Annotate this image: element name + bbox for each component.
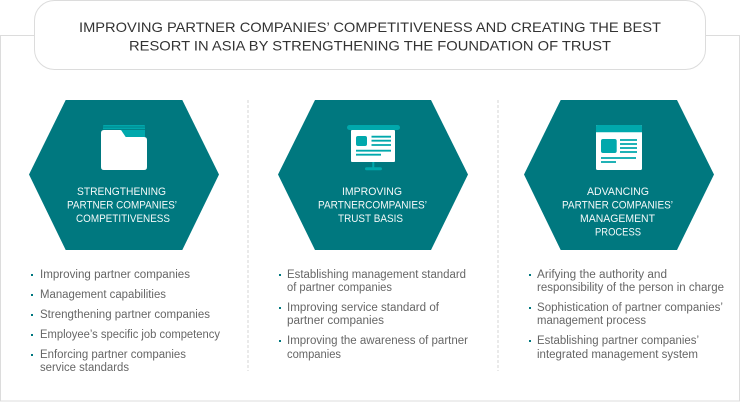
list: trust basis items: partner companies [287,315,384,327]
title box: RESORT IN ASIA BY STRENGTHENING THE FOUNDATION OF TRUST [129,38,611,54]
heading: advancing management process: ADVANCING [587,186,649,198]
list: competitiveness items: service standards [40,362,129,374]
heading: strengthening competitiveness: STRENGTHENING [77,186,166,198]
panel: management process [524,100,724,361]
icon: document window [596,125,642,170]
heading: improving trust basis: PARTNERCOMPANIES’ [318,200,427,212]
hexagon: competitiveness [29,100,219,250]
list: competitiveness items: Strengthening partner companies [40,309,210,321]
heading: strengthening competitiveness [67,186,177,225]
hexagon: management process [524,100,714,250]
heading: strengthening competitiveness: PARTNER COMPANIES’ [67,200,177,212]
list: management process items [529,269,724,361]
list: competitiveness items [31,269,220,374]
list: competitiveness items: Enforcing partner companies [40,349,186,361]
heading: improving trust basis: IMPROVING [342,186,402,198]
heading: advancing management process: PROCESS [595,226,641,238]
heading: advancing management process: MANAGEMENT [580,213,655,225]
list: trust basis items: Improving the awareness of partner [287,335,468,347]
title box [34,0,706,70]
list: competitiveness items: Employee’s specific job competency [40,329,220,341]
panel: competitiveness [29,100,220,374]
icon: presentation board [347,125,400,170]
list: trust basis items: Improving service standard of [287,302,440,314]
list: management process items: management process [537,315,646,327]
list: management process items: integrated management system [537,349,698,361]
list: management process items: Establishing partner companies’ [537,335,699,347]
panel: trust basis [278,100,468,361]
list: management process items: responsibility of the person in charge [537,282,724,294]
heading: improving trust basis [318,186,427,225]
list: management process items: Sophistication of partner companies’ [537,302,723,314]
heading: improving trust basis: TRUST BASIS [338,213,403,225]
heading: advancing management process: PARTNER COMPANIES’ [562,200,673,212]
icon: folder [101,125,147,170]
list: trust basis items: companies [287,349,341,361]
list: competitiveness items: Improving partner companies [40,269,190,281]
list: trust basis items: Establishing management standard [287,269,466,281]
list: trust basis items: of partner companies [287,282,392,294]
heading: advancing management process [562,186,673,238]
list: management process items: Arifying the authority and [537,269,667,281]
heading: strengthening competitiveness: COMPETITIVENESS [76,213,170,225]
hexagon: trust basis [278,100,468,250]
title box: IMPROVING PARTNER COMPANIES’ COMPETITIVENESS AND CREATING THE BEST [79,19,661,35]
list: trust basis items [279,269,468,361]
list: competitiveness items: Management capabilities [40,289,166,301]
